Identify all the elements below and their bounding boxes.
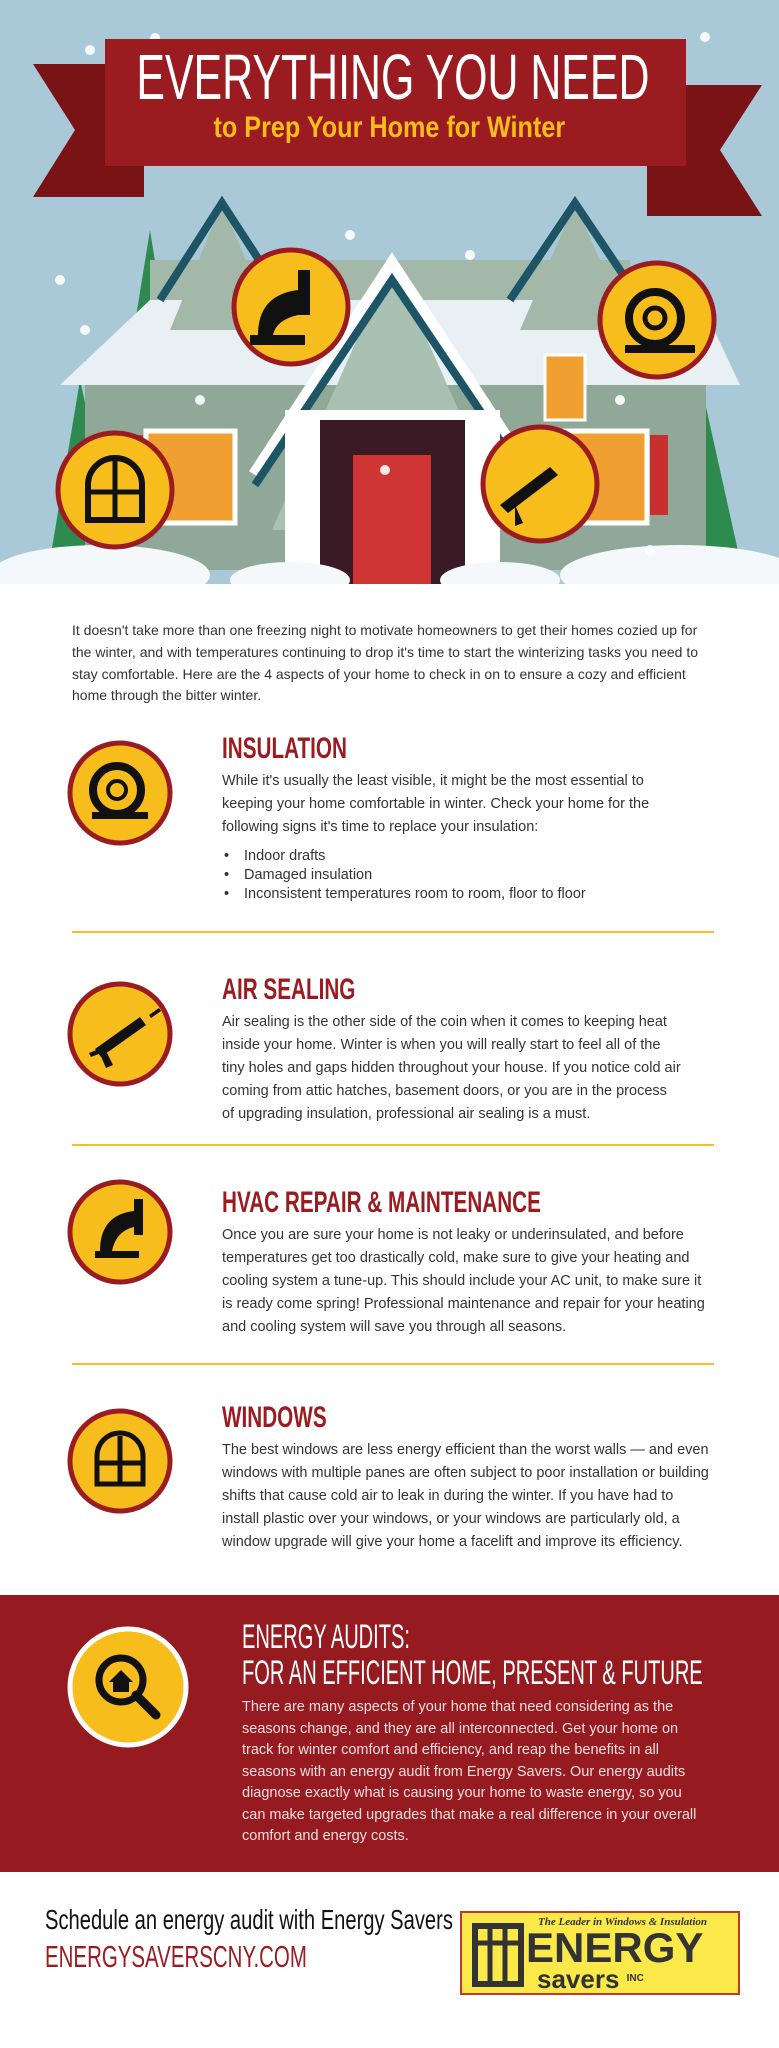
snow [55,32,710,595]
icon: duct [68,1180,172,1284]
section: hvac [68,1180,705,1335]
section: windows [68,1401,709,1550]
panel: energy audits [0,1595,779,1872]
heading: ENERGY AUDITS: [242,1618,410,1656]
footer cta [45,1904,453,1974]
intro text: It doesn't take more than one freezing night to motivate homeowners to get their homes cozied up for the winter, and with temperatures continuing to drop it's time to start the winterizing tasks you need to stay comfortable. Here are the 4 aspects of your home to check in on to ensure a cozy and efficient home through the bitter winter. [72,622,698,703]
heading: FOR AN EFFICIENT HOME, PRESENT & FUTURE [242,1654,703,1692]
body: Air sealing is the other side of the coin when it comes to keeping heat inside your home. Winter is when you will really start to feel all of the tiny holes and gaps hidden throughout your house. If you notice cold air coming from attic hatches, basement doors, or you are in the process of upgrading insulation, professional air sealing is a must. [222,1014,681,1122]
footer cta: Schedule an energy audit with Energy Savers [45,1904,453,1935]
icon circles [58,250,714,547]
subtitle: to Prep Your Home for Winter [214,111,565,144]
heading: WINDOWS [222,1401,327,1434]
logo: savers INC [537,1964,644,1994]
body: Inconsistent temperatures room to room, floor to floor [244,886,586,902]
icon: caulk gun [68,982,172,1086]
body: While it's usually the least visible, it might be the most essential to keeping your home comfortable in winter. Check your home for the following signs it's time to replace your insulation: [222,773,649,835]
icon: window [68,1408,172,1514]
body: Once you are sure your home is not leaky or underinsulated, and before temperatures get too drastically cold, make sure to give your heating and cooling system a tune-up. This should include your AC unit, to make sure it is ready come spring! Professional maintenance and repair for your heating and cooling system will save you through all seasons. [222,1227,705,1335]
heading: AIR SEALING [222,973,355,1006]
header illustration [0,0,779,584]
body: There are many aspects of your home that need considering as the seasons change, and they are all interconnected. Get your home on track for winter comfort and efficiency, and reap the benefits in all seasons with an energy audit from Energy Savers. Our energy audits diagnose exactly what is causing your home to waste energy, so you can make targeted upgrades that make a real difference in your overall comfort and energy costs. [242,1699,696,1844]
heading [242,1618,703,1692]
footer cta: ENERGYSAVERSCNY.COM [45,1939,307,1974]
logo: The Leader in Windows & Insulation [538,1916,707,1928]
house [0,203,779,605]
section: insulation [68,732,649,902]
trees [50,230,740,560]
icon: insulation [68,740,172,846]
logo: ENERGY [526,1924,703,1971]
body: Damaged insulation [244,867,372,883]
body: The best windows are less energy efficient than the worst walls — and even windows with multiple panes are often subject to poor installation or building shifts that cause cold air to leak in during the winter. If you have had to install plastic over your windows, or your windows are particularly old, a window upgrade will give your home a facelift and improve its efficiency. [222,1442,709,1550]
body [222,773,649,902]
title: EVERYTHING YOU NEED [136,41,649,113]
banner [33,39,762,216]
section: air sealing [68,973,681,1122]
heading: INSULATION [222,732,347,765]
body: Indoor drafts [244,848,325,864]
icon: magnifier house [68,1626,188,1748]
logo [460,1911,740,1995]
heading: HVAC REPAIR & MAINTENANCE [222,1186,541,1219]
